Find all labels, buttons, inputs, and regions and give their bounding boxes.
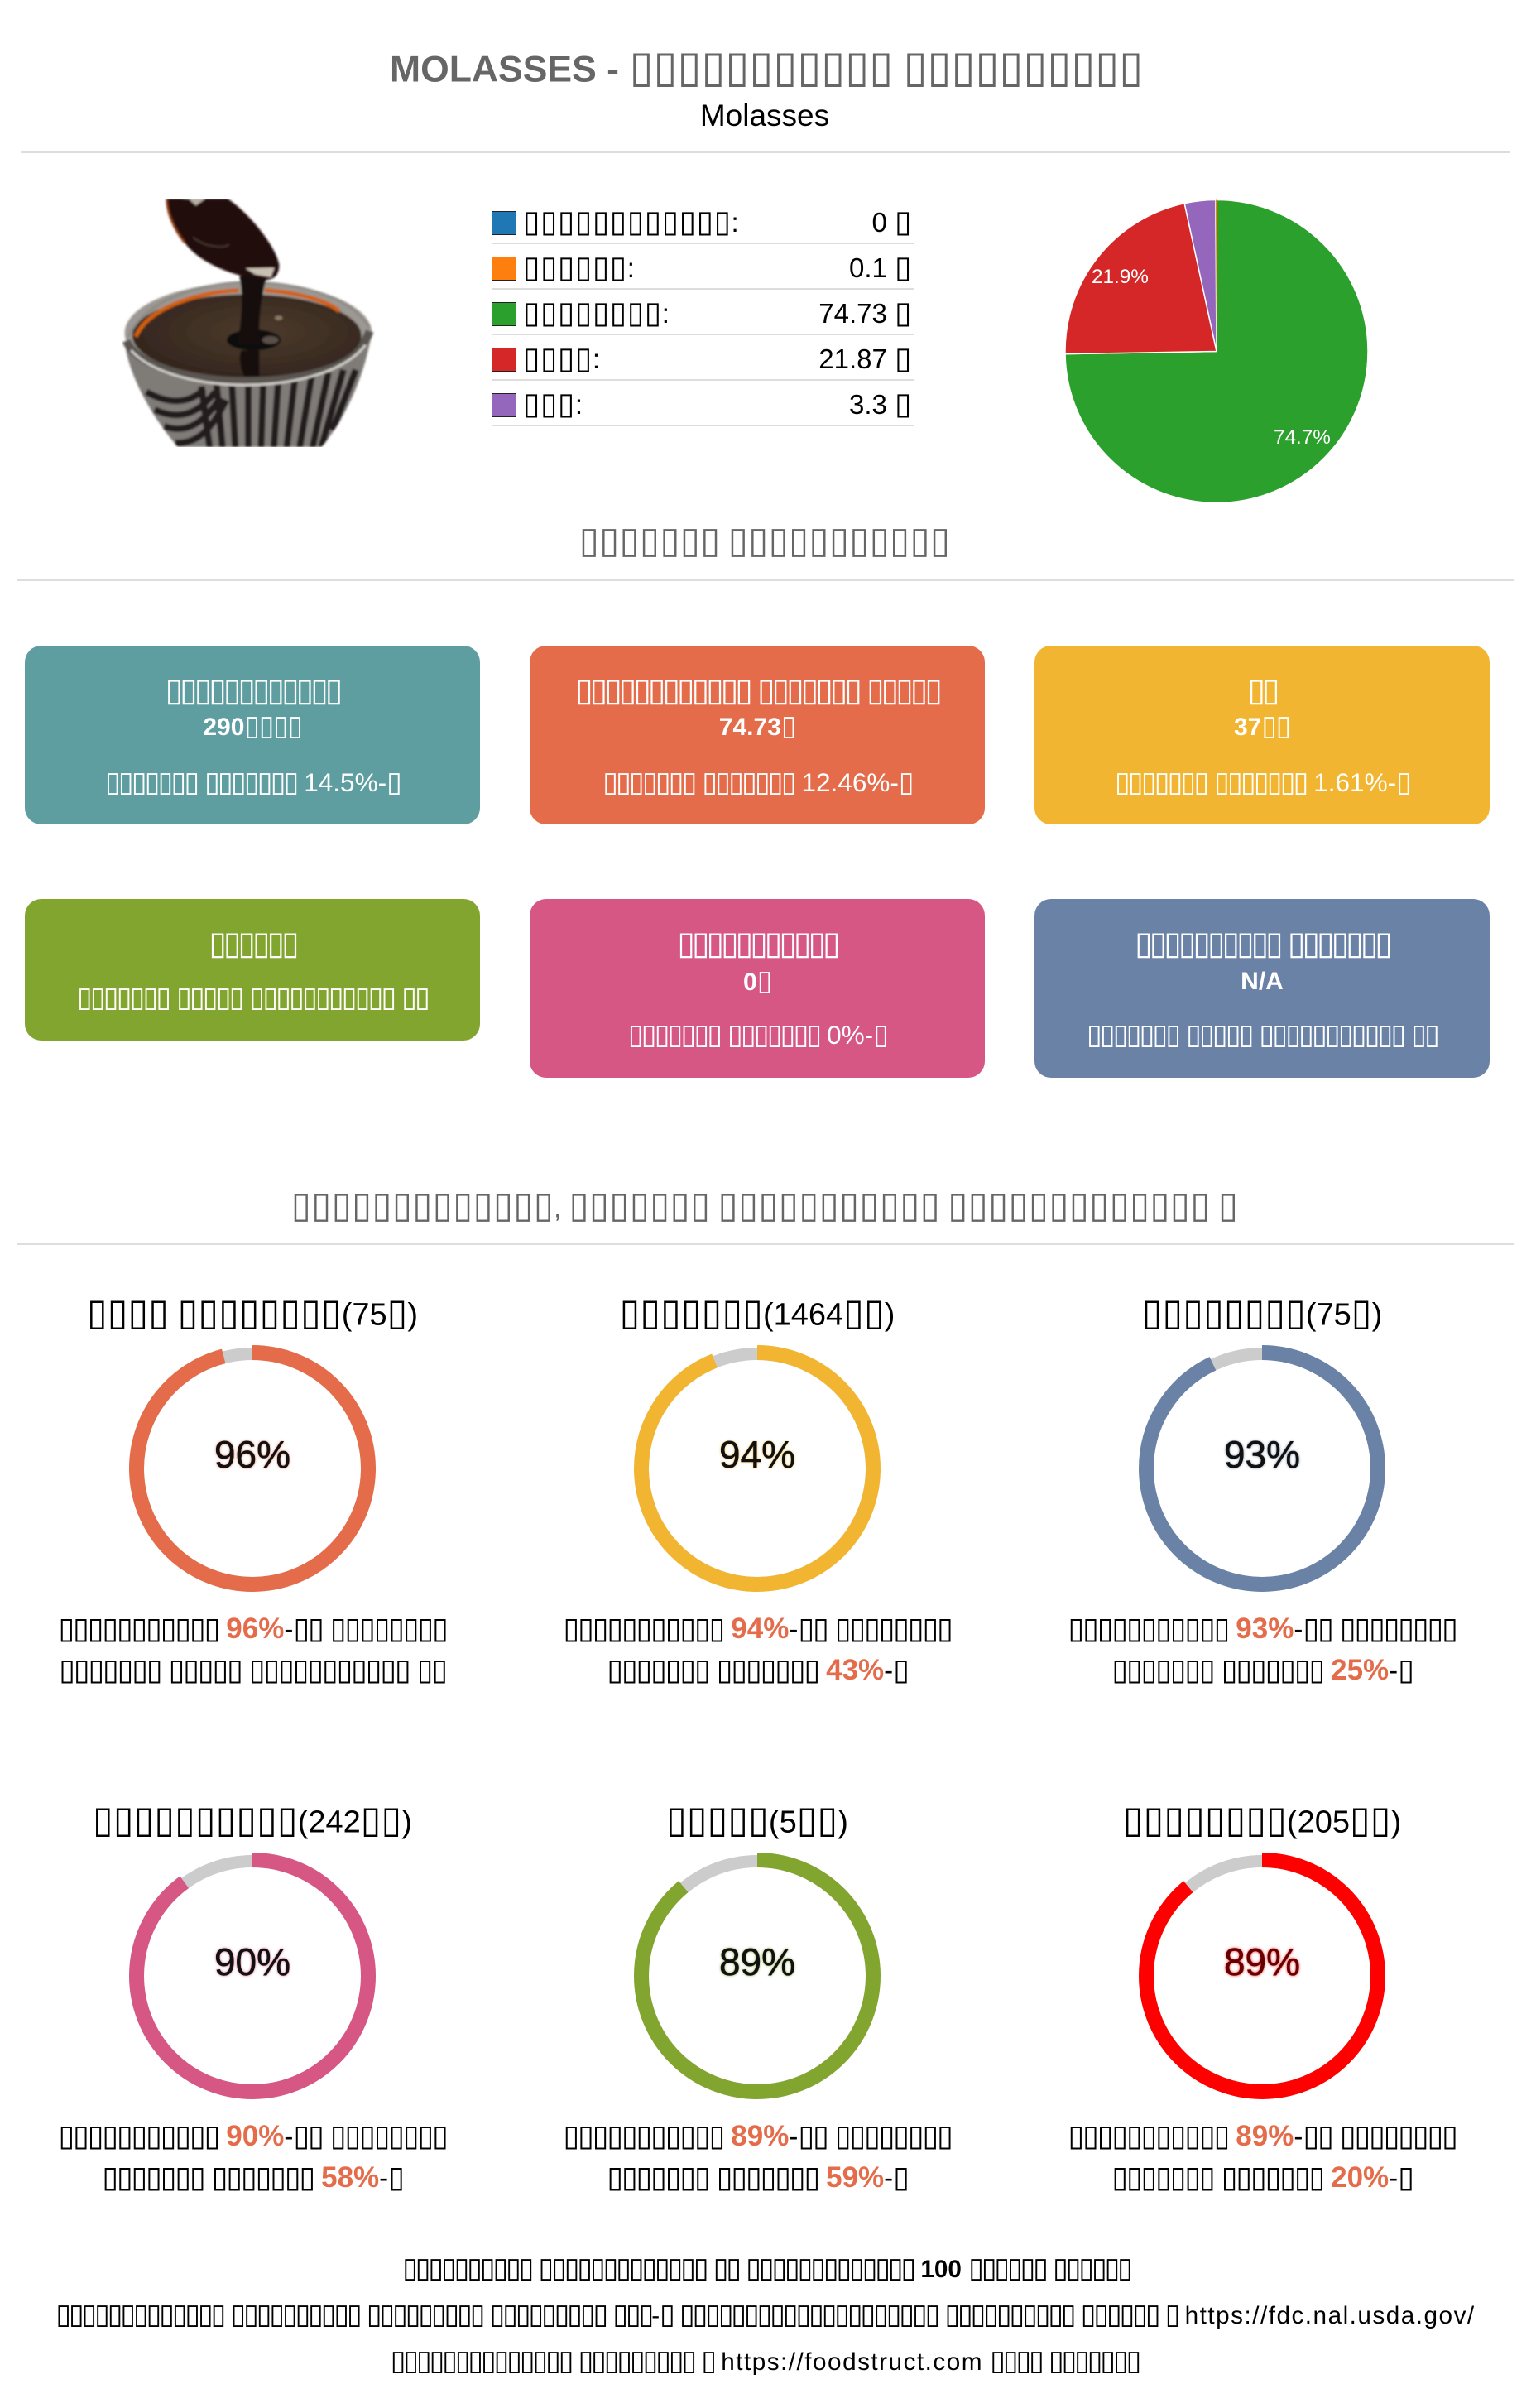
donut chart 94% xyxy=(634,1345,881,1592)
card title: ▯▯▯▯▯▯▯▯▯▯▯▯ xyxy=(166,672,339,709)
card title: ▯▯▯▯▯▯▯▯▯▯▯ xyxy=(677,925,838,962)
ring description line 2: ▯▯▯▯▯▯▯ ▯▯▯▯▯▯▯ 20%-▯ xyxy=(1111,2160,1413,2194)
ring description line 1: ▯▯▯▯▯▯▯▯▯▯▯ 90%-▯▯ ▯▯▯▯▯▯▯▯ xyxy=(58,2119,447,2153)
ring title: ▯▯▯▯▯▯▯▯(75▯) xyxy=(1142,1290,1382,1334)
card title: ▯▯ xyxy=(1247,672,1277,709)
card value: N/A xyxy=(1241,968,1284,995)
legend row 3: 74.73 ▯ xyxy=(818,295,912,330)
legend row 5 xyxy=(492,381,914,426)
panel: ring 3 xyxy=(1068,1290,1457,1687)
pie chart: composition xyxy=(1066,200,1367,502)
legend row 4 xyxy=(492,335,914,381)
card value: 0▯ xyxy=(743,964,771,997)
ring title: ▯▯▯▯▯▯▯▯▯▯(242▯▯) xyxy=(93,1798,412,1841)
panel: ring 5 xyxy=(530,1799,985,2204)
panel: ring 6 xyxy=(1034,1799,1490,2204)
card note: ▯▯▯▯▯▯▯ ▯▯▯▯▯ ▯▯▯▯▯▯▯▯▯▯▯ ▯▯ xyxy=(1087,1018,1438,1051)
card value: 290▯▯▯▯ xyxy=(203,709,302,743)
heading: section 1: ▯▯▯▯▯▯▯ ▯▯▯▯▯▯▯▯▯▯▯ xyxy=(579,520,950,561)
ring percent: 96% xyxy=(214,1433,290,1476)
ring percent: 93% xyxy=(1224,1433,1300,1476)
panel: ring 2 xyxy=(563,1290,952,1687)
panel: ring 4 xyxy=(58,1798,447,2194)
legend row 1: ▯▯▯▯▯▯▯▯▯▯▯▯: xyxy=(523,204,739,239)
heading: section 2: ▯▯▯▯▯▯▯▯▯▯▯▯▯, ▯▯▯▯▯▯▯ ▯▯▯▯▯▯▯▯▯▯▯ ▯▯▯▯▯▯▯▯▯▯▯▯▯ ▯ xyxy=(291,1184,1238,1227)
footer note line 2: ▯▯▯▯▯▯▯▯▯▯▯▯▯ ▯▯▯▯▯▯▯▯▯▯ ▯▯▯▯▯▯▯▯▯ ▯▯▯▯▯▯▯▯▯ ▯▯▯-▯ ▯▯▯▯▯▯▯▯▯▯▯▯▯▯▯▯▯▯▯▯ ▯▯▯▯▯▯▯▯▯▯ ▯▯▯▯▯▯ ▯ https://fdc.nal.usda.gov/ xyxy=(55,2298,1476,2331)
panel: card 5 xyxy=(530,899,985,1078)
ring description line 2: ▯▯▯▯▯▯▯ ▯▯▯▯▯▯▯ 25%-▯ xyxy=(1111,1653,1413,1687)
ring description line 1: ▯▯▯▯▯▯▯▯▯▯▯ 89%-▯▯ ▯▯▯▯▯▯▯▯ xyxy=(1068,2119,1457,2153)
ring percent: 89% xyxy=(719,1940,795,1983)
card daily share: ▯▯▯▯▯▯▯ ▯▯▯▯▯▯▯ 14.5%-▯ xyxy=(105,766,400,799)
ring description line 1: ▯▯▯▯▯▯▯▯▯▯▯ 94%-▯▯ ▯▯▯▯▯▯▯▯ xyxy=(563,1612,952,1646)
card daily share: ▯▯▯▯▯▯▯ ▯▯▯▯▯▯▯ 1.61%-▯ xyxy=(1115,766,1409,799)
legend row 4: 21.87 ▯ xyxy=(818,340,912,376)
ring percent: 94% xyxy=(719,1433,795,1476)
donut chart 89% red xyxy=(1138,1853,1386,2101)
panel: ring 1 xyxy=(58,1290,447,1687)
ring description line 1: ▯▯▯▯▯▯▯▯▯▯▯ 96%-▯▯ ▯▯▯▯▯▯▯▯ xyxy=(58,1612,447,1646)
card daily share: ▯▯▯▯▯▯▯ ▯▯▯▯▯▯▯ 0%-▯ xyxy=(628,1018,886,1051)
subtitle: Molasses xyxy=(700,99,829,132)
card note: ▯▯▯▯▯▯▯ ▯▯▯▯▯ ▯▯▯▯▯▯▯▯▯▯▯ ▯▯ xyxy=(77,981,428,1014)
ring description line 2: ▯▯▯▯▯▯▯ ▯▯▯▯▯▯▯ 43%-▯ xyxy=(607,1653,908,1687)
donut chart 93% xyxy=(1139,1345,1385,1592)
donut chart 96% xyxy=(129,1345,376,1592)
ring title: ▯▯▯▯ ▯▯▯▯▯▯▯▯(75▯) xyxy=(87,1290,418,1334)
pie chart: composition: 21.9% xyxy=(1092,266,1149,288)
card value: 74.73▯ xyxy=(719,709,795,743)
ring title: ▯▯▯▯▯(5▯▯) xyxy=(666,1798,848,1841)
legend row 1: 0 ▯ xyxy=(872,204,912,239)
title: MOLASSES - ▯▯▯▯▯▯▯▯▯▯▯ ▯▯▯▯▯▯▯▯▯▯ xyxy=(390,41,1143,93)
footer note line 1: ▯▯▯▯▯▯▯▯▯▯ ▯▯▯▯▯▯▯▯▯▯▯▯▯ ▯▯ ▯▯▯▯▯▯▯▯▯▯▯▯▯ 100 ▯▯▯▯▯▯ ▯▯▯▯▯▯ xyxy=(402,2252,1130,2285)
ring percent: 90% xyxy=(214,1940,290,1983)
legend row 4: ▯▯▯▯: xyxy=(523,340,600,376)
panel: card 6 xyxy=(1034,899,1490,1078)
card value: 37▯▯ xyxy=(1234,709,1290,743)
ring title: ▯▯▯▯▯▯▯▯(205▯▯) xyxy=(1123,1798,1401,1841)
legend row 3 xyxy=(492,290,914,335)
legend row 2 xyxy=(492,244,914,290)
card title: ▯▯▯▯▯▯▯▯▯▯ ▯▯▯▯▯▯▯ xyxy=(1135,925,1390,962)
card title: ▯▯▯▯▯▯▯▯▯▯▯▯ ▯▯▯▯▯▯▯ ▯▯▯▯▯ xyxy=(575,672,939,709)
donut chart 90% xyxy=(129,1853,376,2099)
legend: nutrient table xyxy=(492,204,914,426)
legend row 5: 3.3 ▯ xyxy=(849,386,912,421)
ring description line 2: ▯▯▯▯▯▯▯ ▯▯▯▯▯▯▯ 59%-▯ xyxy=(607,2160,908,2194)
legend row 3: ▯▯▯▯▯▯▯▯: xyxy=(523,295,670,330)
legend row 5: ▯▯▯: xyxy=(523,386,583,421)
card title: ▯▯▯▯▯▯ xyxy=(209,925,296,962)
panel: card 1 xyxy=(25,646,480,824)
legend row 2: ▯▯▯▯▯▯: xyxy=(523,249,635,285)
footer note line 3: ▯▯▯▯▯▯▯▯▯▯▯▯▯▯ ▯▯▯▯▯▯▯▯▯ ▯ https://foodstruct.com ▯▯▯▯ ▯▯▯▯▯▯▯ xyxy=(391,2344,1139,2377)
ring description line 1: ▯▯▯▯▯▯▯▯▯▯▯ 89%-▯▯ ▯▯▯▯▯▯▯▯ xyxy=(563,2119,952,2153)
legend row 2: 0.1 ▯ xyxy=(849,249,912,285)
pie chart: composition: 74.7% xyxy=(1274,426,1331,449)
panel: card 2 xyxy=(530,646,985,824)
panel: card 4 xyxy=(25,899,480,1041)
panel: card 3 xyxy=(1034,646,1490,824)
ring description line 2: ▯▯▯▯▯▯▯ ▯▯▯▯▯▯▯ 58%-▯ xyxy=(102,2160,403,2194)
ring description line 2: ▯▯▯▯▯▯▯ ▯▯▯▯▯ ▯▯▯▯▯▯▯▯▯▯▯ ▯▯ xyxy=(59,1653,446,1687)
ring title: ▯▯▯▯▯▯▯(1464▯▯) xyxy=(620,1290,895,1334)
donut chart 89% green xyxy=(633,1853,881,2101)
image: molasses dripping from a spoon into a glass bowl xyxy=(122,199,375,447)
card daily share: ▯▯▯▯▯▯▯ ▯▯▯▯▯▯▯ 12.46%-▯ xyxy=(602,766,912,799)
ring percent: 89% xyxy=(1224,1940,1300,1983)
ring description line 1: ▯▯▯▯▯▯▯▯▯▯▯ 93%-▯▯ ▯▯▯▯▯▯▯▯ xyxy=(1068,1612,1457,1646)
legend row 1 xyxy=(492,199,914,244)
